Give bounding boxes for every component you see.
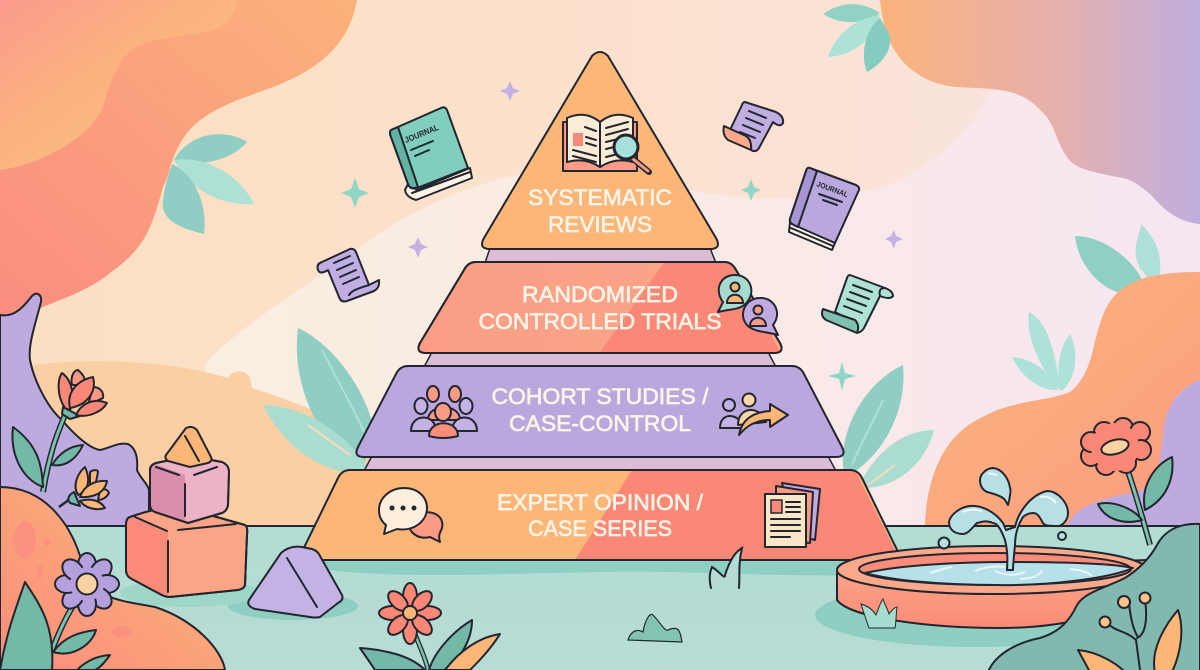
water jets — [938, 468, 1068, 570]
background leaves behind pyramid — [263, 328, 934, 488]
flower: coral tulip — [12, 370, 107, 492]
label: expert opinion / case series: EXPERT OPINION / — [497, 490, 704, 515]
tier: expert opinion / case series — [298, 470, 902, 560]
icon: open book with magnifier — [563, 115, 649, 172]
hill: bottom left — [0, 487, 225, 670]
orange block — [165, 427, 212, 467]
label: systematic reviews — [528, 185, 672, 237]
icon: speech bubbles — [379, 488, 442, 542]
flower: coral bottom centre — [360, 583, 500, 670]
flower: purple daisy — [0, 553, 119, 670]
blocks stack — [126, 427, 342, 618]
tier: randomized controlled trials — [418, 262, 782, 353]
label: systematic reviews: REVIEWS — [548, 212, 652, 237]
icon: teal journal: JOURNAL — [403, 122, 440, 145]
hill spots — [14, 521, 132, 637]
blob: top left — [0, 0, 357, 320]
ground — [0, 526, 1200, 670]
label: randomized controlled trials: CONTROLLED TRIALS — [478, 309, 722, 334]
icon: stack of case documents — [765, 483, 820, 547]
plant: bottom right — [1078, 592, 1181, 670]
icon: people with arrow — [720, 394, 788, 435]
connector bands — [364, 248, 836, 471]
icon: group of people — [411, 386, 477, 438]
grass tuft — [710, 548, 742, 588]
grass by basin — [861, 599, 897, 628]
leaves: top right — [823, 4, 890, 72]
icon: teal scroll — [822, 275, 893, 333]
bush — [628, 614, 682, 642]
label: cohort studies / case-control — [492, 384, 709, 436]
tier: systematic reviews — [482, 52, 718, 249]
bottom block — [126, 507, 247, 597]
flower: right coral — [1081, 418, 1173, 545]
flower: orange tulip — [59, 467, 109, 509]
hill: bottom right — [988, 524, 1200, 670]
icon: teal journal — [390, 107, 472, 200]
fountain — [837, 468, 1147, 628]
label: randomized controlled trials: RANDOMIZED — [522, 282, 678, 307]
blob: top right — [880, 0, 1200, 224]
blob: left purple — [0, 294, 149, 527]
label: systematic reviews: SYSTEMATIC — [528, 185, 672, 210]
lilac pebble — [248, 547, 342, 618]
icon: lilac journal: JOURNAL — [815, 179, 850, 199]
icon: lilac scroll top — [724, 102, 783, 151]
pyramid — [298, 52, 902, 560]
icon: discussion bubbles — [718, 275, 778, 335]
icon: lilac scroll left — [318, 249, 379, 302]
leaves: top left — [163, 134, 254, 234]
icon: lilac journal — [789, 168, 859, 250]
label: expert opinion / case series — [497, 490, 704, 541]
label: cohort studies / case-control: COHORT STUDIES / — [492, 384, 709, 409]
label: expert opinion / case series: CASE SERIES — [528, 516, 672, 541]
sparkles — [341, 81, 903, 391]
leaves: right side — [1012, 224, 1160, 390]
label: randomized controlled trials — [478, 282, 722, 334]
blob: right — [925, 272, 1200, 526]
label: cohort studies / case-control: CASE-CONTROL — [509, 411, 691, 436]
tier: cohort studies / case-control — [356, 366, 844, 457]
basin — [837, 546, 1147, 628]
pink block — [150, 456, 229, 523]
hill: left back — [30, 361, 370, 527]
